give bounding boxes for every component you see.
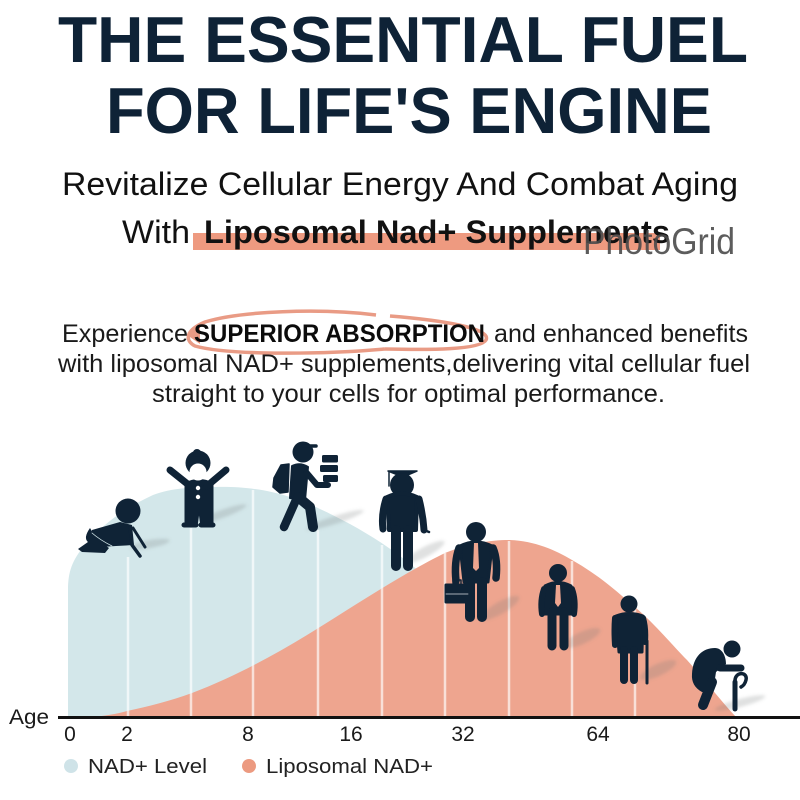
title: THE ESSENTIAL FUEL: [58, 3, 748, 76]
subtitle: Revitalize Cellular Energy And Combat Aging: [62, 166, 738, 202]
axis labels: 32: [451, 723, 475, 746]
axis labels: 80: [727, 723, 751, 746]
body paragraph: [57, 320, 750, 408]
title: FOR LIFE'S ENGINE: [106, 74, 712, 147]
icon: middle-aged man with tie: [541, 564, 575, 646]
body paragraph: SUPERIOR ABSORPTION: [194, 320, 485, 348]
area: NAD+ level: [68, 487, 440, 717]
axis line: [58, 716, 800, 719]
icon: businessman with briefcase: [445, 522, 497, 617]
body paragraph: Experience: [62, 320, 188, 348]
figure shadows: [130, 501, 766, 714]
age grid lines: [128, 490, 635, 717]
icon: toddler with raised arms: [170, 449, 226, 526]
legend: [64, 756, 433, 778]
icon: graduate: [382, 471, 429, 566]
axis labels: 0: [64, 723, 76, 746]
body paragraph: and enhanced benefits: [494, 320, 748, 348]
axis labels: [9, 706, 751, 746]
icon: older man with stick: [614, 596, 647, 683]
icon: student with backpack and books: [273, 442, 338, 527]
title: [58, 3, 748, 147]
subtitle: With: [122, 214, 190, 250]
subtitle highlight bar: [193, 233, 660, 250]
hand-drawn ellipse around emphasis: [187, 311, 486, 353]
axis labels: Age: [9, 706, 49, 729]
axis labels: 8: [242, 723, 254, 746]
watermark: PhotoGrid: [583, 221, 735, 262]
legend: Liposomal NAD+: [266, 756, 433, 778]
body paragraph: straight to your cells for optimal performance.: [152, 380, 665, 408]
icon: crawling baby: [78, 498, 145, 556]
subtitle: [62, 166, 738, 250]
axis labels: 64: [586, 723, 610, 746]
area: liposomal NAD+: [90, 540, 736, 717]
axis labels: 2: [121, 723, 133, 746]
chart: area curves: [58, 487, 800, 719]
subtitle: Liposomal Nad+ Supplements: [204, 214, 670, 250]
body paragraph: with liposomal NAD+ supplements,delivering vital cellular fuel: [57, 350, 750, 378]
icon: bent elderly person with cane: [692, 640, 746, 709]
legend: NAD+ Level: [88, 756, 207, 778]
axis labels: 16: [339, 723, 363, 746]
